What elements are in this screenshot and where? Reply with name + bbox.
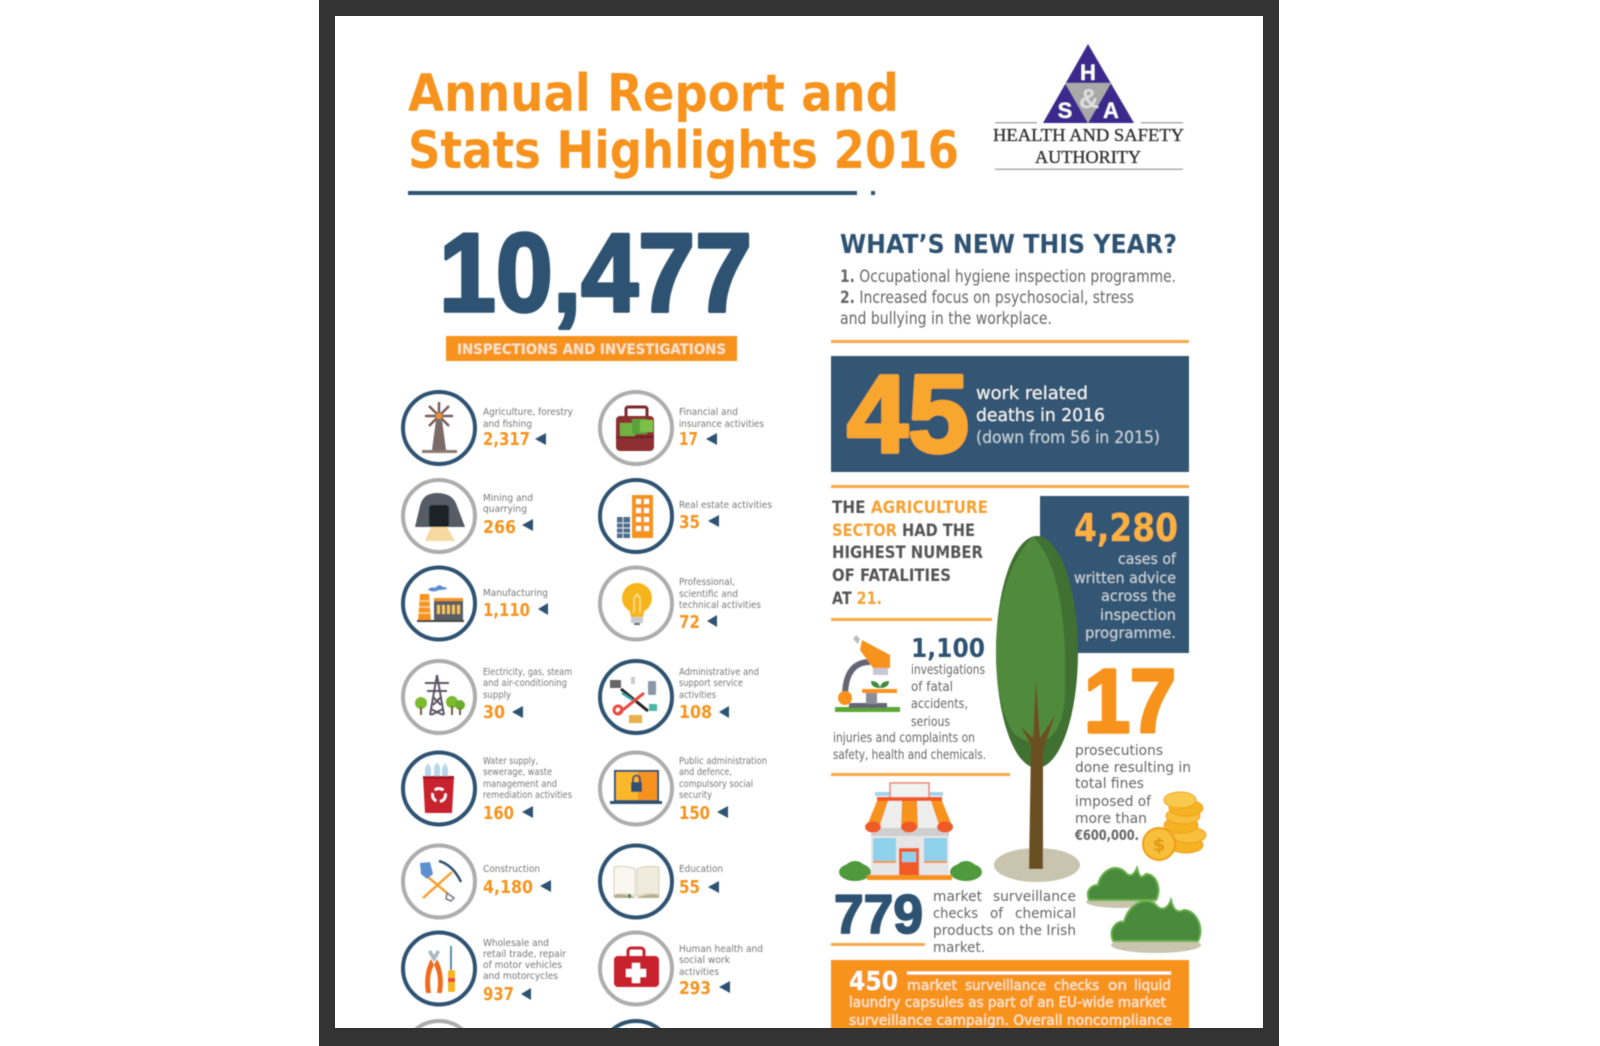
sector: professional: technical activities (679, 600, 761, 611)
sector: human health: 293 (679, 978, 711, 999)
stat: 10,477 inspections: INSPECTIONS AND INVESTIGATIONS (457, 342, 726, 358)
stat: 779 market checks: products on the Irish (933, 923, 1076, 939)
sector: wholesale: retail trade, repair (483, 949, 566, 960)
stat: 779 market checks: checks (933, 906, 978, 922)
stat: 1,100 investigations: injuries and complaints on (833, 730, 975, 746)
panel: 450 market surveillance: liquid (1134, 978, 1171, 994)
what's new this year: and bullying in the workplace. (840, 309, 1052, 328)
icon: coins: $ (1153, 835, 1165, 856)
agriculture fatalities text: AT 21. (832, 589, 882, 608)
sector: administrative: 108 (679, 702, 712, 723)
stat: 17 prosecutions: imposed of (1075, 794, 1152, 810)
stat: 17 prosecutions (1074, 652, 1191, 844)
stat: 779 market checks (831, 883, 1076, 956)
icon: microscope (835, 635, 900, 712)
icon: shop (839, 783, 982, 881)
icon: coins (1143, 792, 1206, 860)
stat: 17 prosecutions: prosecutions (1075, 743, 1163, 759)
next sector circle: right, cut off (600, 1021, 672, 1046)
sector: public administration: compulsory social (679, 779, 753, 790)
sector: financial: 17 (679, 429, 698, 450)
stat: 779 market checks: market (933, 889, 982, 905)
stat: 1,100 investigations: 1,100 (911, 634, 985, 664)
sector: real estate: Real estate activities (679, 500, 772, 511)
stat: 1,100 investigations (833, 634, 986, 763)
icon: bushes (1086, 868, 1201, 953)
sector: manufacturing: Manufacturing (483, 588, 548, 599)
stat: 17 prosecutions: total fines (1075, 776, 1144, 792)
sector: education (600, 846, 723, 918)
title underline (408, 191, 875, 195)
panel: 450 market surveillance: laundry capsules as part of an EU-wide market (849, 995, 1166, 1011)
sector: professional: Professional, (679, 577, 735, 588)
next sector circle: left, cut off (403, 1021, 475, 1046)
stat: 1,100 investigations: of fatal (911, 679, 953, 695)
sector: professional: scientific and (679, 589, 738, 600)
sector: electricity: 30 (483, 702, 505, 723)
sector: wholesale: and motorcycles (483, 971, 558, 982)
sector: wholesale: Wholesale and (483, 938, 549, 949)
sector: real estate (600, 480, 772, 552)
what's new this year: WHAT’S NEW THIS YEAR? (840, 230, 1177, 260)
sector: wholesale: of motor vehicles (483, 960, 562, 971)
sector: public administration (600, 752, 767, 824)
sector: wholesale (403, 932, 566, 1005)
sector: public administration: security (679, 790, 712, 801)
sector: water supply: remediation activities (483, 790, 572, 801)
sector: administrative (600, 661, 759, 733)
sector: water supply (403, 752, 572, 824)
panel: 45 deaths: deaths in 2016 (976, 405, 1105, 426)
stat: 1,100 investigations: accidents, (911, 696, 968, 712)
sector: construction (403, 846, 551, 918)
sector: human health: activities (679, 967, 719, 978)
sector: construction: Construction (483, 864, 540, 875)
dark frame (319, 0, 1279, 1046)
panel: 45 deaths (831, 353, 1189, 476)
stat: 17 prosecutions: done resulting in (1075, 760, 1191, 776)
white page (335, 16, 1263, 1028)
stat: 17 prosecutions: more than (1075, 811, 1147, 827)
panel: 4,280 written advice: across the (1101, 587, 1176, 605)
stat: 1,100 investigations: serious (911, 714, 950, 730)
panel: 4,280 written advice: programme. (1085, 624, 1176, 642)
bottom frame bar (319, 1028, 1279, 1046)
sector: mining: 266 (483, 517, 516, 538)
panel: 450 market surveillance (831, 960, 1189, 1030)
agriculture fatalities text: OF FATALITIES (832, 566, 951, 585)
stat: 779 market checks: of (990, 906, 1004, 922)
sector: human health: Human health and (679, 944, 763, 955)
panel: 4,280 written advice: written advice (1074, 569, 1176, 587)
panel: 45 deaths: (down from 56 in 2015) (976, 428, 1160, 448)
sector: administrative: support service (679, 678, 743, 689)
sector: mining: Mining and (483, 493, 533, 504)
sector: administrative: Administrative and (679, 667, 759, 678)
sector: public administration: 150 (679, 803, 710, 824)
sector: manufacturing (403, 568, 548, 640)
sector: agriculture: Agriculture, forestry (483, 407, 573, 418)
what's new this year: 2. Increased focus on psychosocial, stress (840, 288, 1134, 307)
stat: 779 market checks: market. (933, 940, 985, 956)
panel: 450 market surveillance: on (1108, 978, 1127, 994)
logo: Health and Safety Authority: A (1103, 98, 1119, 123)
sector: public administration: Public administration (679, 756, 767, 767)
sector: financial: insurance activities (679, 419, 764, 430)
sector: administrative: activities (679, 690, 716, 701)
logo: Health and Safety Authority: S (1058, 98, 1072, 123)
logo: Health and Safety Authority (993, 44, 1184, 170)
panel: 450 market surveillance: 450 (849, 967, 898, 997)
page content (403, 44, 1206, 1046)
panel: 4,280 written advice: inspection (1100, 606, 1176, 624)
sector: manufacturing: 1,110 (483, 600, 530, 621)
stat: 779 market checks: chemical (1015, 906, 1076, 922)
logo: Health and Safety Authority: H (1080, 60, 1096, 85)
sector: wholesale: 937 (483, 984, 514, 1005)
stat: 779 market checks: 779 (834, 883, 923, 945)
title: Annual Report and (408, 64, 899, 124)
sector: mining (403, 480, 533, 552)
stat: 779 market checks: surveillance (993, 889, 1076, 905)
sector: agriculture: 2,317 (483, 429, 530, 450)
panel: 4,280 written advice: cases of (1118, 550, 1176, 568)
logo: Health and Safety Authority: HEALTH AND SAFETY (993, 125, 1184, 145)
sector: public administration: and defence, (679, 767, 732, 778)
sector: agriculture (403, 392, 573, 464)
sector: professional (600, 568, 761, 640)
panel: 450 market surveillance: checks (1054, 978, 1099, 994)
sector: human health: social work (679, 955, 730, 966)
what's new this year (840, 230, 1177, 328)
title: Stats Highlights 2016 (408, 121, 959, 181)
sector: financial: Financial and (679, 407, 738, 418)
agriculture fatalities text: HIGHEST NUMBER (832, 543, 983, 562)
panel: 45 deaths: work related (976, 383, 1088, 404)
panel: 450 market surveillance: surveillance campaign. Overall noncompliance (849, 1013, 1172, 1029)
sector: education: 55 (679, 877, 700, 898)
sector: education: Education (679, 864, 723, 875)
stat: 1,100 investigations: investigations (911, 662, 985, 678)
icon: tree (994, 536, 1080, 882)
sector: construction: 4,180 (483, 877, 533, 898)
sector: water supply: 160 (483, 803, 514, 824)
panel: 45 deaths: 45 (847, 353, 969, 476)
sector: mining: quarrying (483, 504, 527, 515)
title (408, 64, 959, 181)
sector: financial (600, 392, 764, 464)
agriculture fatalities text: THE AGRICULTURE (832, 498, 988, 517)
sector: electricity: supply (483, 690, 511, 701)
agriculture fatalities text: SECTOR HAD THE (832, 521, 975, 540)
sector: water supply: sewerage, waste (483, 767, 552, 778)
panel: 450 market surveillance: market (907, 978, 958, 994)
what's new this year: 1. Occupational hygiene inspection programme. (840, 267, 1176, 286)
sector: agriculture: and fishing (483, 419, 532, 430)
sector: electricity (403, 661, 572, 733)
panel: 4,280 written advice (1040, 496, 1189, 653)
agriculture fatalities text (832, 498, 988, 608)
panel: 450 market surveillance: surveillance (965, 978, 1046, 994)
sector: human health (600, 932, 763, 1004)
sector: real estate: 35 (679, 512, 700, 533)
sector: professional: 72 (679, 612, 700, 633)
sector: electricity: and air-conditioning (483, 678, 567, 689)
stat: 17 prosecutions: €600,000. (1074, 828, 1139, 844)
sector: water supply: management and (483, 779, 557, 790)
logo: Health and Safety Authority: & (1079, 83, 1099, 114)
panel: 4,280 written advice: 4,280 (1074, 506, 1178, 550)
sector: electricity: Electricity, gas, steam (483, 667, 572, 678)
logo: Health and Safety Authority: AUTHORITY (1035, 147, 1141, 167)
sector: water supply: Water supply, (483, 756, 538, 767)
stat: 1,100 investigations: safety, health and chemicals. (833, 747, 986, 763)
stat: 17 prosecutions: 17 (1084, 652, 1176, 752)
stat: 10,477 inspections: 10,477 (439, 211, 752, 335)
